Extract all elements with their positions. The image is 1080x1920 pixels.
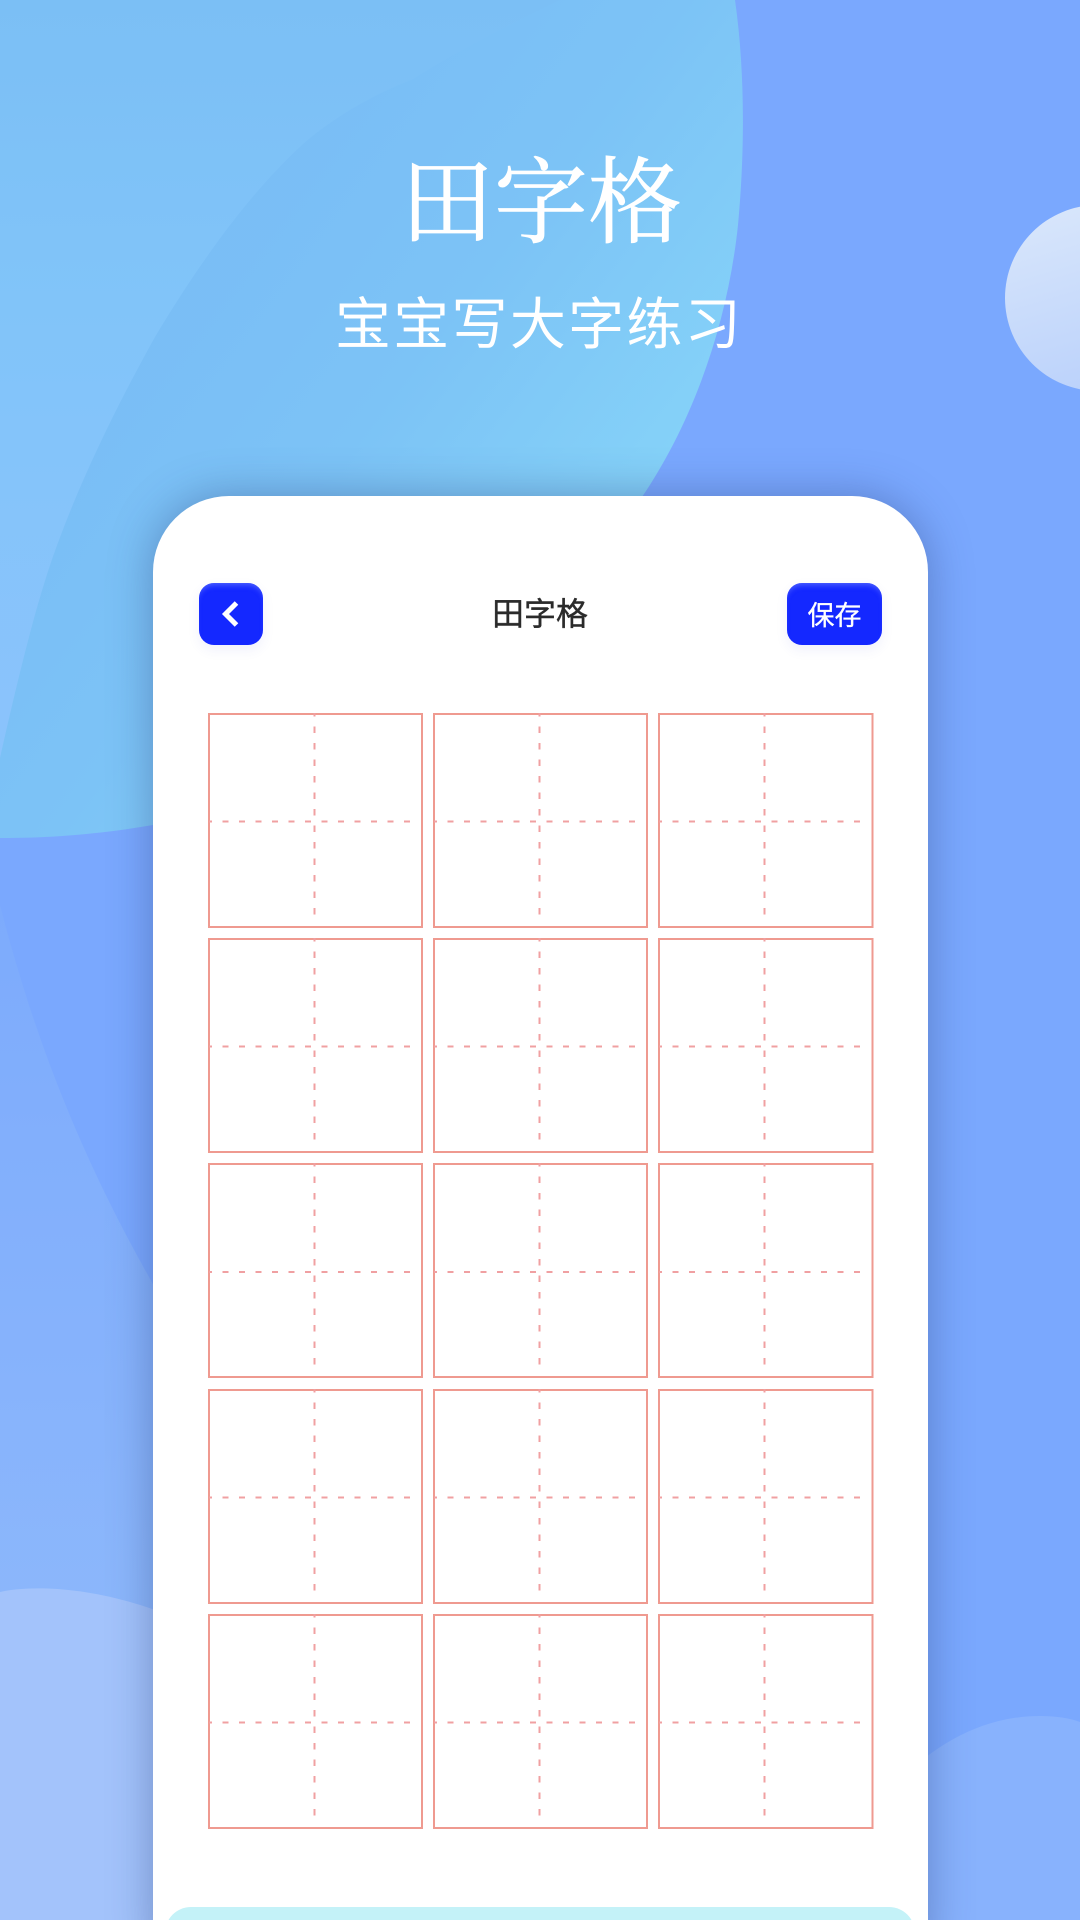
title: 田字格 bbox=[400, 152, 682, 256]
grid cell row 5 col 2 bbox=[434, 1614, 647, 1828]
card heading: 田字格 bbox=[492, 596, 588, 632]
back button bbox=[199, 583, 263, 645]
subtitle: 宝宝写大字练习 bbox=[335, 293, 743, 356]
grid cell row 2 col 2 bbox=[434, 938, 647, 1152]
shape: right circle bbox=[1005, 205, 1080, 391]
grid cell row 3 col 3 bbox=[659, 1163, 872, 1377]
panel: phone card bbox=[153, 496, 928, 1920]
icon: back chevron bbox=[222, 601, 238, 627]
grid cell row 4 col 3 bbox=[659, 1389, 872, 1603]
grid cell row 2 col 3 bbox=[659, 938, 872, 1152]
bottom action bar bbox=[165, 1907, 915, 1920]
grid cell row 4 col 2 bbox=[434, 1389, 647, 1603]
grid cell row 1 col 1 bbox=[209, 713, 422, 927]
grid cell row 1 col 3 bbox=[659, 713, 872, 927]
grid cell row 3 col 2 bbox=[434, 1163, 647, 1377]
save button bbox=[787, 583, 882, 645]
shape: large light blue blob bbox=[0, 0, 743, 838]
shape: bottom right blob bbox=[900, 1716, 1080, 1920]
shape: bottom left circle bbox=[0, 1588, 180, 1920]
grid cell row 1 col 2 bbox=[434, 713, 647, 927]
shape: lower left lighter wave bbox=[0, 905, 180, 1920]
grid cell row 5 col 1 bbox=[209, 1614, 422, 1828]
shape: lighter left wave in blob bbox=[0, 0, 560, 758]
grid cell row 5 col 3 bbox=[659, 1614, 872, 1828]
save button: 保存 bbox=[808, 601, 862, 631]
grid cell row 3 col 1 bbox=[209, 1163, 422, 1377]
grid cell row 2 col 1 bbox=[209, 938, 422, 1152]
grid cell row 4 col 1 bbox=[209, 1389, 422, 1603]
